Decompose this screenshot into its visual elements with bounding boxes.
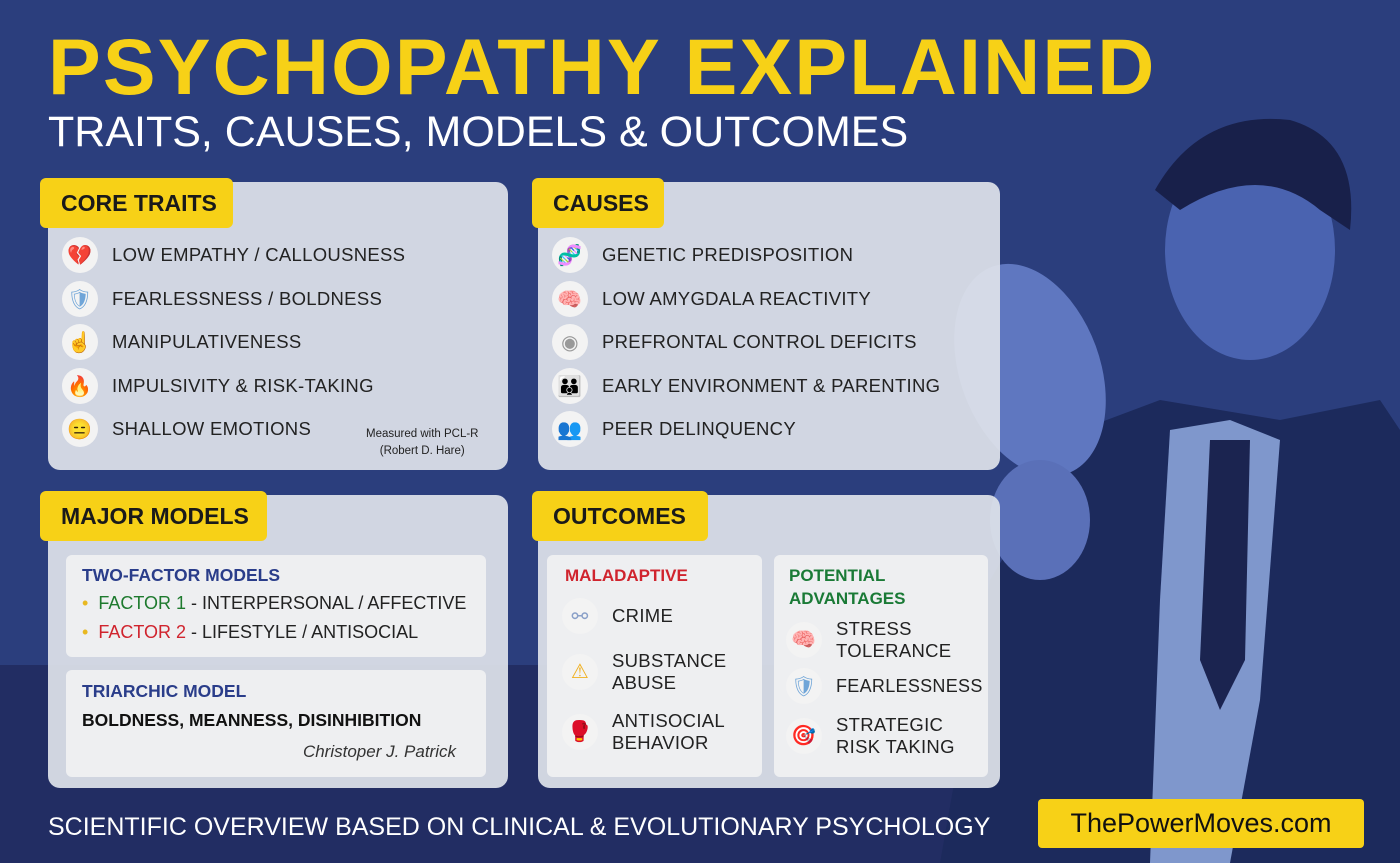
potential advantages box: TOLERANCE xyxy=(836,640,951,661)
maladaptive box: 🥊 xyxy=(567,721,593,743)
panel: major models xyxy=(48,495,508,788)
core trait items xyxy=(62,237,405,447)
potential advantages box: STRESS xyxy=(836,618,912,639)
tab: major models: MAJOR MODELS xyxy=(61,503,249,529)
potential advantages box: STRATEGIC xyxy=(836,714,943,735)
tab: causes xyxy=(532,178,664,228)
maladaptive box: ANTISOCIAL xyxy=(612,710,725,731)
panel: outcomes xyxy=(538,495,1000,788)
core trait items: LOW EMPATHY / CALLOUSNESS xyxy=(112,244,405,265)
potential advantages box: RISK TAKING xyxy=(836,736,955,757)
potential advantages box: FEARLESSNESS xyxy=(836,676,983,696)
tab: causes: CAUSES xyxy=(553,190,649,216)
note: PCL-R: Measured with PCL-R xyxy=(366,428,478,440)
cause items: ◉ xyxy=(561,332,579,354)
title: PSYCHOPATHY EXPLAINED xyxy=(48,22,1156,111)
core trait items: FEARLESSNESS / BOLDNESS xyxy=(112,288,382,309)
cause items: EARLY ENVIRONMENT & PARENTING xyxy=(602,375,940,396)
cause items: GENETIC PREDISPOSITION xyxy=(602,244,853,265)
two-factor box: TWO-FACTOR MODELS xyxy=(82,565,280,585)
potential advantages box xyxy=(774,555,988,777)
potential advantages box: 🛡 xyxy=(791,676,817,698)
panel: causes xyxy=(538,182,1000,470)
maladaptive box: ABUSE xyxy=(612,672,676,693)
note: PCL-R: (Robert D. Hare) xyxy=(380,445,465,457)
triarchic box: BOLDNESS, MEANNESS, DISINHIBITION xyxy=(82,710,421,730)
core trait items: 🔥 xyxy=(67,376,93,398)
lower background band xyxy=(0,665,1400,863)
tab: major models xyxy=(40,491,267,541)
illustration: man with mask xyxy=(994,118,1400,863)
note: PCL-R xyxy=(366,428,478,457)
triarchic box: TRIARCHIC MODEL xyxy=(82,681,246,701)
core trait items: ☝ xyxy=(67,332,93,354)
cause items: PEER DELINQUENCY xyxy=(602,418,796,439)
footer text: SCIENTIFIC OVERVIEW BASED ON CLINICAL & EVOLUTIONARY PSYCHOLOGY xyxy=(48,813,990,841)
maladaptive box: MALADAPTIVE xyxy=(565,566,688,585)
triarchic box: Christoper J. Patrick xyxy=(303,742,456,761)
core trait items: 😑 xyxy=(67,418,93,440)
potential advantages box: POTENTIAL xyxy=(789,566,885,585)
maladaptive box: CRIME xyxy=(612,605,673,626)
potential advantages box: 🧠 xyxy=(791,629,817,651)
panel: core traits xyxy=(48,182,508,470)
core trait items: SHALLOW EMOTIONS xyxy=(112,418,311,439)
cause items: 👪 xyxy=(557,376,583,398)
tab: core traits xyxy=(40,178,233,228)
core trait items: 🛡 xyxy=(67,288,93,310)
maladaptive box: BEHAVIOR xyxy=(612,732,709,753)
cause items: 🧠 xyxy=(557,288,583,310)
two-factor box xyxy=(66,555,486,657)
maladaptive box: SUBSTANCE xyxy=(612,650,726,671)
potential advantages box: ADVANTAGES xyxy=(789,589,906,608)
website badge xyxy=(1038,799,1364,848)
cause items: PREFRONTAL CONTROL DEFICITS xyxy=(602,331,917,352)
subtitle: TRAITS, CAUSES, MODELS & OUTCOMES xyxy=(48,108,908,156)
cause items: 👥 xyxy=(557,418,583,440)
two-factor box: • FACTOR 2 - LIFESTYLE / ANTISOCIAL xyxy=(82,622,418,642)
maladaptive box xyxy=(547,555,762,777)
tab: core traits: CORE TRAITS xyxy=(61,190,217,216)
maladaptive box: ⚯ xyxy=(571,606,589,628)
potential advantages box: 🎯 xyxy=(791,725,817,747)
tab: outcomes: OUTCOMES xyxy=(553,503,686,529)
core trait items: 💔 xyxy=(67,244,93,266)
core trait items: IMPULSIVITY & RISK-TAKING xyxy=(112,375,374,396)
tab: outcomes xyxy=(532,491,708,541)
cause items: LOW AMYGDALA REACTIVITY xyxy=(602,288,871,309)
triarchic box xyxy=(66,670,486,777)
core trait items: MANIPULATIVENESS xyxy=(112,331,302,352)
maladaptive box: ⚠ xyxy=(571,661,589,683)
website badge: ThePowerMoves.com xyxy=(1070,808,1332,838)
two-factor box: • FACTOR 1 - INTERPERSONAL / AFFECTIVE xyxy=(82,593,466,613)
cause items: 🧬 xyxy=(557,244,583,266)
cause items xyxy=(552,237,940,447)
